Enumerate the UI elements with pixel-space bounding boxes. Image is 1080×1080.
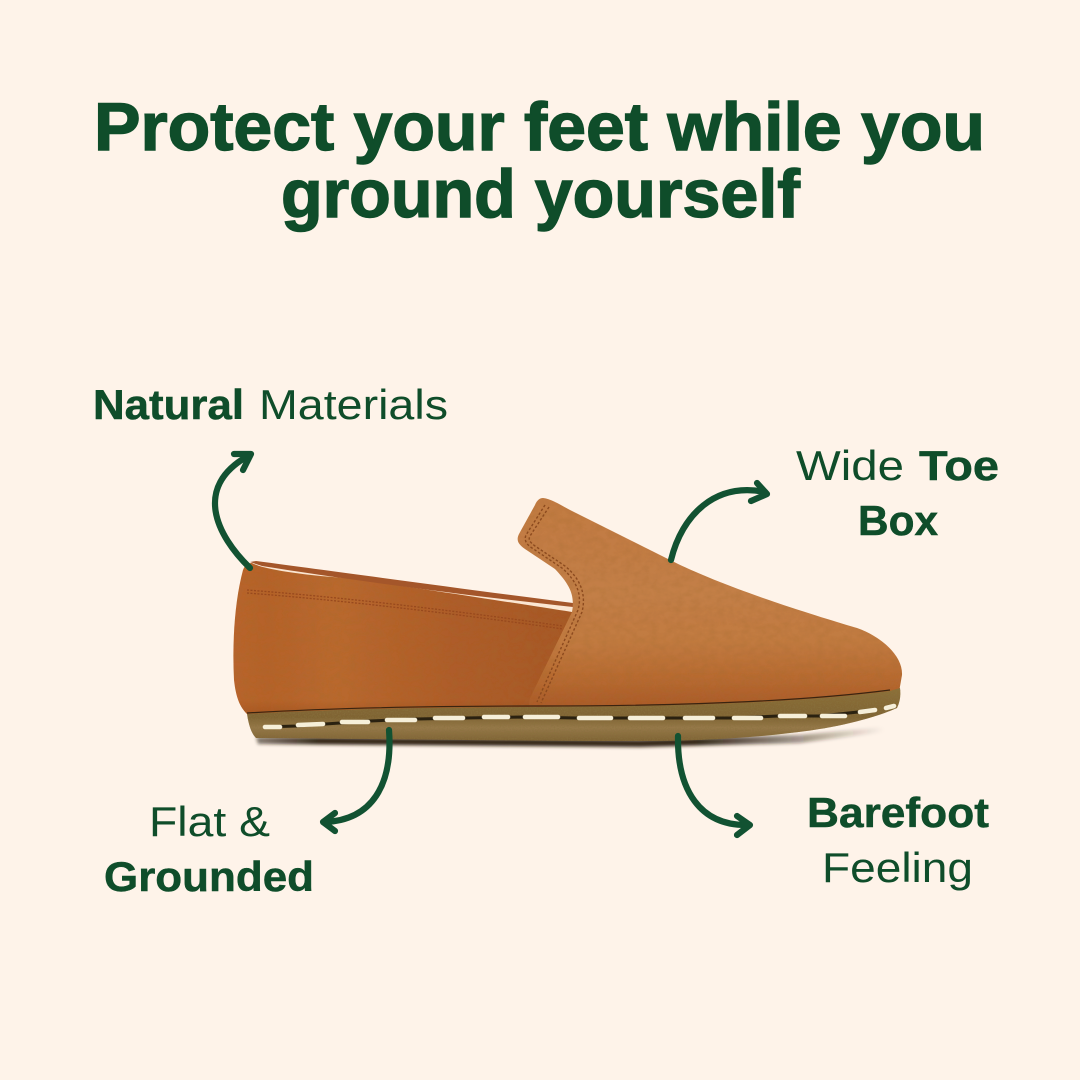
rear quarter: [233, 563, 574, 714]
rear quarter lower shading: [234, 668, 550, 714]
sole stitching gaps: [264, 712, 858, 727]
label: Natural Materials: [93, 381, 448, 428]
arrow: Flat & Grounded: [323, 730, 389, 831]
label: Wide Toe Box: Box: [858, 497, 939, 544]
label: Flat & Grounded: Grounded: [104, 853, 314, 900]
label: Wide Toe Box: Toe: [919, 442, 999, 489]
inner lining: [262, 565, 572, 614]
label: Wide Toe Box: Wide: [796, 442, 904, 489]
ground shadow: [256, 727, 884, 747]
label: Barefoot Feeling: Barefoot: [807, 789, 989, 836]
label: Natural Materials: Natural: [93, 381, 244, 428]
label: Barefoot Feeling: Feeling: [822, 844, 973, 891]
vamp stitching: [525, 505, 583, 703]
label: Flat & Grounded: Flat &: [149, 798, 270, 845]
heel stitching: [247, 590, 563, 629]
arrow: Wide Toe Box: [671, 483, 767, 560]
title: [94, 89, 985, 232]
title: Protect your feet while you: [94, 89, 985, 165]
label: Barefoot Feeling: [807, 789, 989, 891]
title: ground yourself: [281, 156, 800, 232]
label: Natural Materials: Materials: [259, 381, 448, 428]
front vamp: [518, 498, 902, 710]
product image: leather slip-on shoe: [233, 498, 902, 747]
arrow: Barefoot Feeling: [678, 736, 750, 835]
heel collar edge: [250, 561, 573, 607]
sole stitching: [265, 706, 894, 727]
label: Flat & Grounded: [104, 798, 314, 900]
arrow: Natural Materials: [215, 454, 251, 568]
upper and sole seam: [247, 690, 890, 713]
sole: [247, 688, 900, 741]
label: Wide Toe Box: [796, 442, 999, 544]
